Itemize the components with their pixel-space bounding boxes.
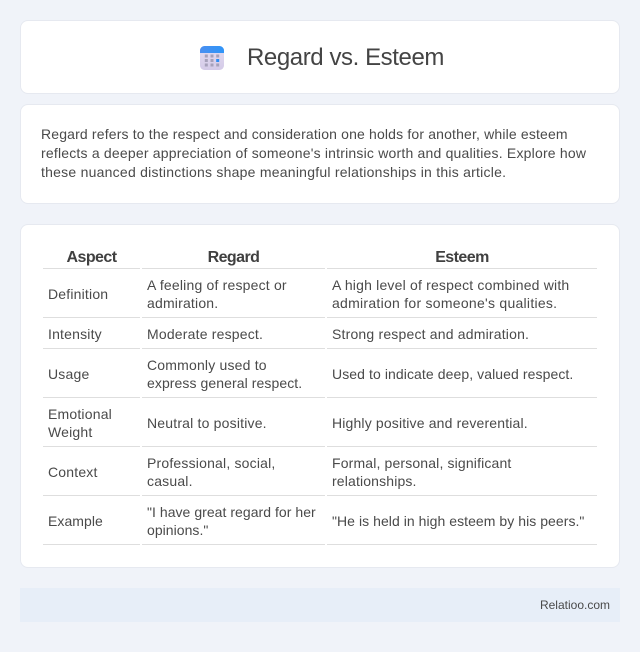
row: Definition: Definition <box>48 286 108 302</box>
Usage esteem: Used to indicate deep, valued respect. <box>332 366 573 382</box>
intro panel <box>20 104 620 204</box>
row: Example: Example <box>48 513 103 529</box>
Example regard <box>147 504 316 538</box>
Context regard: Professional, social, <box>147 455 276 471</box>
Definition esteem: admiration for someone's qualities. <box>332 295 557 311</box>
Definition regard <box>147 277 287 311</box>
Definition esteem <box>332 277 569 311</box>
table panel <box>20 224 620 568</box>
Intensity regard: Moderate respect. <box>147 326 263 342</box>
footer text: Relatioo.com <box>540 598 610 612</box>
footer bar <box>20 588 620 622</box>
Example regard: "I have great regard for her <box>147 504 316 520</box>
header: Aspect: Aspect <box>66 249 117 266</box>
Usage regard <box>147 357 302 391</box>
intro text <box>41 126 586 180</box>
Emotional Weight esteem: Highly positive and reverential. <box>332 415 528 431</box>
Usage regard: Commonly used to <box>147 357 267 373</box>
Context regard: casual. <box>147 473 193 489</box>
row: Usage: Usage <box>48 366 89 382</box>
Example esteem: "He is held in high esteem by his peers." <box>332 513 584 529</box>
row: Context: Context <box>48 464 98 480</box>
title: Regard vs. Esteem <box>247 44 444 71</box>
Definition esteem: A high level of respect combined with <box>332 277 569 293</box>
row: Emotional Weight: Emotional <box>48 406 112 422</box>
row: Emotional Weight: Weight <box>48 424 92 440</box>
Context esteem <box>332 455 512 489</box>
Usage regard: express general respect. <box>147 375 302 391</box>
Intensity esteem: Strong respect and admiration. <box>332 326 529 342</box>
intro text: these nuanced distinctions shape meaningful relationships in this article. <box>41 164 506 180</box>
Context regard <box>147 455 276 489</box>
Context esteem: relationships. <box>332 473 417 489</box>
header: Esteem: Esteem <box>435 249 489 266</box>
Definition regard: A feeling of respect or <box>147 277 287 293</box>
Example regard: opinions." <box>147 522 208 538</box>
Context esteem: Formal, personal, significant <box>332 455 511 471</box>
title card <box>20 20 620 94</box>
row: Intensity: Intensity <box>48 326 102 342</box>
intro text: reflects a deeper appreciation of someone's intrinsic worth and qualities. Explore how <box>41 145 586 161</box>
Emotional Weight regard: Neutral to positive. <box>147 415 267 431</box>
intro text: Regard refers to the respect and consideration one holds for another, while esteem <box>41 126 568 142</box>
Definition regard: admiration. <box>147 295 218 311</box>
icon: calendar <box>200 46 224 70</box>
row: Emotional Weight <box>48 406 112 440</box>
header: Regard: Regard <box>208 249 259 266</box>
